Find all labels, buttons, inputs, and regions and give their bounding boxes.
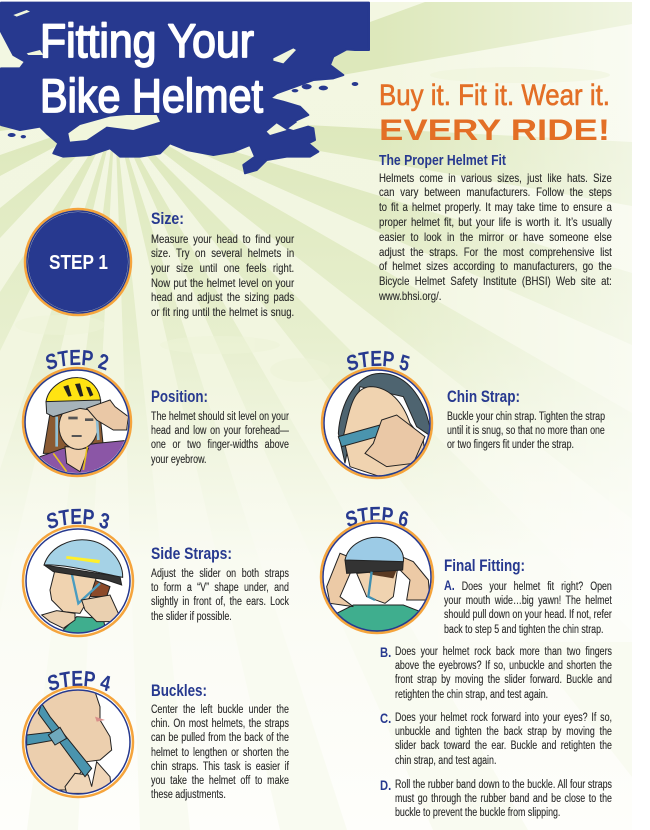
intro text <box>379 171 612 303</box>
buckles text: you take the helmet off to make <box>151 775 289 787</box>
badge: step 1: STEP 1 <box>49 252 108 274</box>
tagline: EVERY RIDE! <box>379 114 610 147</box>
text: step B: front strap by moving the slider forward. Buckle and <box>395 674 612 686</box>
chin strap text <box>447 411 605 451</box>
buckles text <box>151 704 290 801</box>
title: Bike Helmet <box>40 69 263 122</box>
heading: chin strap: Chin Strap: <box>447 387 520 406</box>
text: step B <box>395 646 612 700</box>
text: step B: Does your helmet rock back more than two fingers <box>395 646 612 658</box>
heading: final fitting: Final Fitting: <box>444 556 525 575</box>
position text <box>151 411 289 466</box>
intro text: adjust the straps. For the most comprehensive list <box>379 245 612 259</box>
text: step C: unbuckle and tighten the back strap by moving the <box>395 726 612 738</box>
blue paint splat banner <box>0 2 370 174</box>
chin strap text: or two fingers fit under the strap. <box>447 439 574 451</box>
illustration: step 4 chin strap buckle: STEP 4 <box>48 670 110 692</box>
letter: B: B. <box>380 644 391 660</box>
text: step D: Roll the rubber band down to the buckle. All four straps <box>395 779 612 791</box>
size text: head and adjust the sizing pads <box>151 290 294 304</box>
heading: side straps: Side Straps: <box>151 544 232 563</box>
text: step D: must go through the rubber band and be close to the <box>395 793 612 805</box>
side straps text: Adjust the slider on both straps <box>151 568 289 580</box>
badge: step 1 <box>24 208 132 316</box>
illustration: step 6 boy fitting helmet: STEP 6 <box>346 506 408 526</box>
title <box>40 14 264 122</box>
panel: step 3 side straps <box>22 508 289 638</box>
size text <box>151 232 294 319</box>
panel: step 5 chin strap <box>320 350 605 480</box>
position text: your eyebrow. <box>151 454 206 466</box>
heading: size: Size: <box>151 209 184 228</box>
intro text: Bicycle Helmet Safety Institute (BHSI) Web site at: <box>379 274 612 288</box>
position text: one or two finger-widths above <box>151 439 289 451</box>
text: step C: slider back toward the ear. Buckle and retighten the <box>395 740 612 752</box>
buckles text: can be pulled from the back of the <box>151 732 289 744</box>
illustration: step 5 buckling chin strap <box>320 350 434 480</box>
illustration: step 5 buckling chin strap: STEP 5 <box>347 350 410 370</box>
position text: The helmet should sit level on your <box>151 411 289 423</box>
panel: step 6 final fitting <box>320 506 612 819</box>
heading: buckles: Buckles: <box>151 681 207 700</box>
illustration: step 6 boy fitting helmet <box>320 506 434 634</box>
chin strap text: Buckle your chin strap. Tighten the strap <box>447 411 605 423</box>
text: step C: Does your helmet rock forward into your eyes? If so, <box>395 712 612 724</box>
heading: position: Position: <box>151 387 208 406</box>
position text: head and low on your forehead— <box>151 425 289 437</box>
panel: step 2 position <box>22 350 289 478</box>
buckles text: Center the left buckle under the <box>151 704 289 716</box>
text: step B: retighten the chin strap, and test again. <box>395 688 548 700</box>
intro text: easier to look in the mirror or have someone else <box>379 230 612 244</box>
text: step A: back to step 5 and tighten the chin strap. <box>444 624 603 636</box>
intro text: www.bhsi.org/. <box>379 289 441 303</box>
intro text: to fit a helmet properly. It may take time to ensure a <box>379 200 612 214</box>
heading: the proper helmet fit: The Proper Helmet Fit <box>379 152 506 169</box>
buckles text: chin. On most helmets, the straps <box>151 718 289 730</box>
size text: your size until one feels right. <box>151 261 294 275</box>
size text: or fit ring until the helmet is snug. <box>151 305 294 319</box>
text: step D: buckle to prevent the buckle from slipping. <box>395 807 560 819</box>
size text: size. Try on several helmets in <box>151 246 294 260</box>
intro text: can vary between manufacturers. Follow the steps <box>379 185 612 199</box>
intro text: of helmet sizes according to manufacturers, go the <box>379 259 612 273</box>
illustration: step 2 girl adjusting helmet: STEP 2 <box>46 350 108 370</box>
size text: Measure your head to find your <box>151 232 294 246</box>
text: step B: above the eyebrows? If so, unbuckle and shorten the <box>395 660 612 672</box>
illustration: step 4 chin strap buckle <box>22 670 134 798</box>
text: step A <box>444 577 612 636</box>
side straps text: slightly in front of, the ears. Lock <box>151 596 289 608</box>
text: step C: chin strap, and test again. <box>395 754 496 766</box>
size text: Now put the helmet level on your <box>151 276 294 290</box>
buckles text: helmet to lengthen or shorten the <box>151 746 289 758</box>
panel: step 1 size <box>24 208 294 319</box>
text: step A: A. Does your helmet fit right? Open <box>444 577 612 593</box>
illustration: step 3 boy adjusting side strap: STEP 3 <box>47 508 110 529</box>
intro text: proper helmet fit, but your life is worth it. It’s usually <box>379 215 612 229</box>
side straps text <box>151 568 289 622</box>
panel: step 4 buckles <box>22 670 290 801</box>
panel: intro <box>379 79 612 303</box>
text: step C <box>395 712 612 766</box>
letter: C: C. <box>380 710 391 726</box>
illustration: step 3 boy adjusting side strap <box>22 508 134 638</box>
tagline <box>379 79 610 147</box>
tagline: Buy it. Fit it. Wear it. <box>379 79 610 112</box>
buckles text: these adjustments. <box>151 789 226 801</box>
buckles text: chin straps. This task is easier if <box>151 761 289 773</box>
side straps text: the slider if possible. <box>151 610 232 622</box>
letter: D: D. <box>380 777 391 793</box>
title: Fitting Your <box>40 14 254 67</box>
illustration: step 2 girl adjusting helmet <box>22 350 132 478</box>
chin strap text: until it is snug, so that no more than one <box>447 425 605 437</box>
text: step A: your mouth wide…big yawn! The helmet <box>444 595 612 607</box>
side straps text: to form a “V” shape under, and <box>151 582 289 594</box>
text: step D <box>395 779 612 819</box>
text: step A: should pull down on your head. If not, refer <box>444 609 612 621</box>
intro text: Helmets come in various sizes, just like hats. Size <box>379 171 612 185</box>
